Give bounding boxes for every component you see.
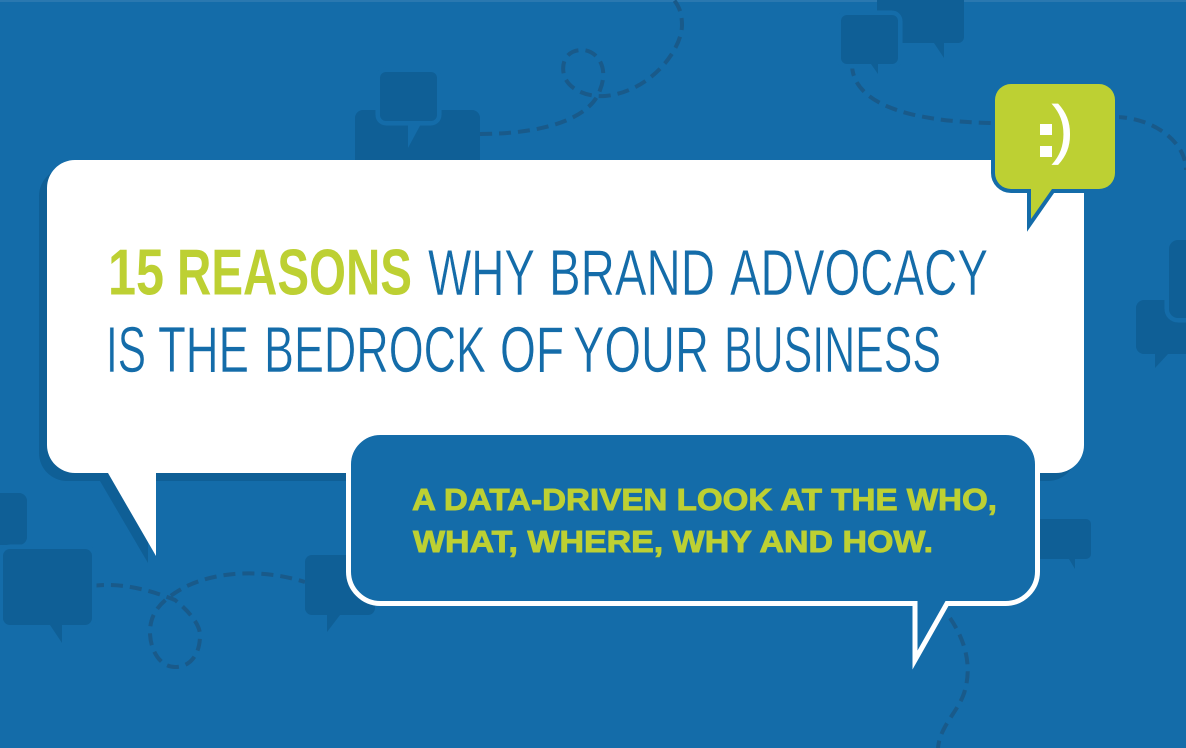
background chat icon: behind small bubble right (1030, 519, 1091, 569)
main white speech bubble (47, 160, 1084, 556)
dashed trail: bottom left loop (92, 573, 305, 667)
title: line two: IS (106, 313, 146, 386)
title (106, 236, 988, 386)
title: rest of line one: BRAND (549, 236, 715, 309)
title: highlighted words: 15 (108, 236, 164, 308)
title: line two: BUSINESS (724, 313, 941, 386)
smiley colon (1040, 124, 1052, 157)
background chat icons: bottom left (0, 493, 92, 643)
title: line two: YOUR (573, 313, 709, 386)
background chat icons: top centre (355, 72, 480, 170)
title: rest of line one: ADVOCACY (730, 236, 988, 309)
dashed trail: bottom right (938, 618, 968, 748)
title: line two: THE (158, 313, 249, 386)
smiley mouth: ) (1052, 92, 1074, 165)
title: line two: BEDROCK (264, 313, 486, 386)
title: rest of line one (428, 236, 988, 309)
background chat icon: bottom centre (305, 555, 375, 632)
background chat icons: right edge (1136, 240, 1186, 368)
title: line two (106, 313, 941, 386)
secondary blue speech bubble (348, 432, 1038, 660)
green smiley speech bubble (995, 84, 1115, 219)
title: highlighted words (108, 236, 412, 308)
subtitle (412, 482, 997, 559)
title: line two: OF (500, 313, 564, 386)
dashed trail: top right (852, 64, 1186, 170)
title: highlighted words: REASONS (177, 236, 412, 308)
subtitle line two: WHAT, WHERE, WHY AND HOW. (413, 524, 933, 559)
main bubble shadow (39, 168, 1076, 563)
subtitle line one: A DATA-DRIVEN LOOK AT THE WHO, (412, 482, 997, 517)
dashed trail: top centre loop (480, 0, 682, 134)
background chat icons: top right (841, 0, 964, 74)
title: rest of line one: WHY (428, 236, 535, 309)
